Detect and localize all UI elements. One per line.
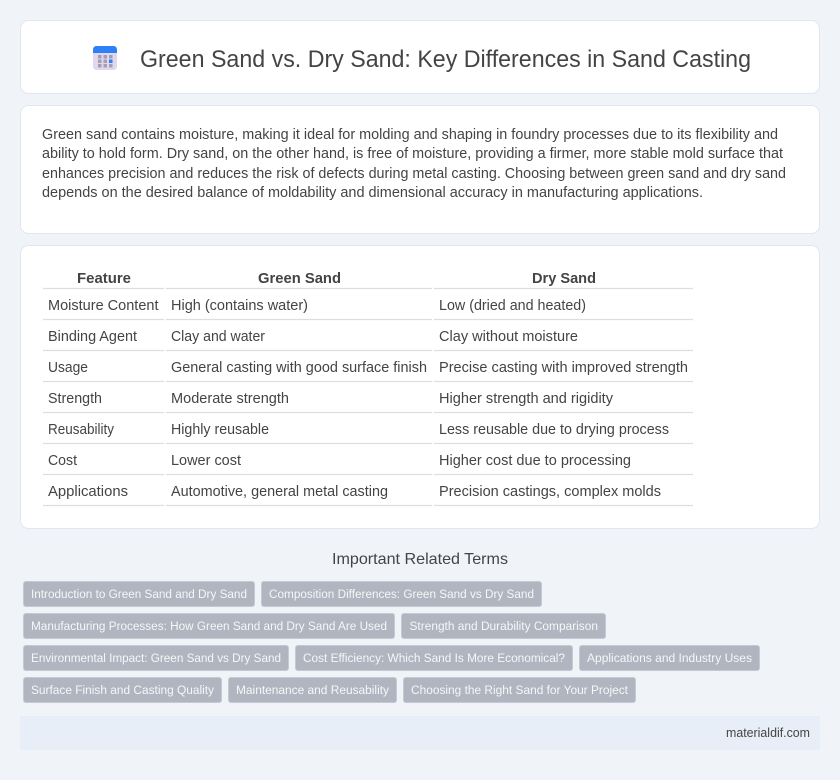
table row: cost [48, 453, 631, 469]
table row: cost: Higher cost due to processing [439, 453, 631, 469]
chip: composition: Composition Differences: Green Sand vs Dry Sand [269, 587, 534, 601]
table row: binding agent: Clay without moisture [439, 329, 578, 345]
table row: cost: Lower cost [171, 453, 241, 469]
table row: applications [48, 484, 661, 500]
table row: moisture content: Low (dried and heated) [439, 298, 586, 314]
text block: introduction paragraph: ability to hold form. Dry sand, on the other hand, is free of moisture, providing a firmer, more stable mold surface that [42, 146, 783, 162]
chip: choosing: Choosing the Right Sand for Your Project [411, 683, 629, 697]
icon: calendar table [93, 46, 117, 70]
chip: cost: Cost Efficiency: Which Sand Is More Economical? [303, 651, 565, 665]
chip: maintenance [228, 678, 396, 702]
footer [20, 716, 820, 750]
title: Green Sand vs. Dry Sand: Key Differences in Sand Casting [140, 46, 751, 73]
chip: environmental [24, 646, 288, 670]
table row: moisture content: Moisture Content [48, 298, 159, 314]
chip: applications [580, 646, 760, 670]
table row: binding agent [48, 329, 578, 345]
table row: usage: Precise casting with improved strength [439, 360, 688, 376]
table header row: Feature [77, 270, 131, 287]
chip: surface finish [24, 678, 222, 702]
table row: cost: Cost [48, 453, 77, 469]
heading: important related terms: Important Related Terms [332, 551, 508, 568]
related term chips [24, 582, 760, 702]
table row: applications: Automotive, general metal casting [171, 484, 388, 500]
table row: strength [48, 391, 614, 407]
table row: applications: Applications [48, 484, 128, 500]
table row: usage: General casting with good surface finish [171, 360, 427, 376]
chip: applications: Applications and Industry Uses [587, 651, 752, 665]
table row: reusability: Less reusable due to drying process [439, 422, 669, 438]
chip: manufacturing [24, 614, 394, 638]
table row: usage: Usage [48, 360, 88, 376]
table row: usage [48, 360, 688, 376]
table header row [77, 270, 596, 287]
table row: moisture content: High (contains water) [171, 298, 308, 314]
table row: binding agent: Clay and water [171, 329, 265, 345]
table header row: Green Sand [258, 270, 341, 287]
text block: introduction paragraph: depends on the desired balance of moldability and dimensional accuracy in manufacturing applications. [42, 185, 703, 201]
chip: introduction [24, 582, 254, 606]
table row: binding agent: Binding Agent [48, 329, 137, 345]
chip: introduction: Introduction to Green Sand and Dry Sand [31, 587, 247, 601]
table row: strength: Moderate strength [171, 391, 289, 407]
table row: reusability: Reusability [48, 422, 115, 438]
table header row: Dry Sand [532, 270, 596, 287]
panel: header [20, 20, 820, 94]
chip: maintenance: Maintenance and Reusability [236, 683, 390, 697]
chip: manufacturing: Manufacturing Processes: How Green Sand and Dry Sand Are Used [31, 619, 387, 633]
footer: materialdif.com [726, 726, 810, 740]
chip: choosing [404, 678, 636, 702]
panel: comparison table [20, 246, 820, 528]
table row: reusability [48, 422, 669, 438]
text block: introduction paragraph: enhances precision and reduces the risk of defects during metal casting. Choosing between green sand and dry sand [42, 166, 786, 182]
chip: cost [296, 646, 572, 670]
text block: introduction paragraph [42, 127, 786, 201]
chip: strength [402, 614, 606, 638]
table row: moisture content [48, 298, 586, 314]
panel: introduction [20, 106, 820, 234]
table row: strength: Strength [48, 391, 102, 407]
chip: strength: Strength and Durability Comparison [410, 619, 598, 633]
text block: introduction paragraph: Green sand contains moisture, making it ideal for molding and shaping in foundry processes due to its flexibility and [42, 127, 778, 143]
table row: reusability: Highly reusable [171, 422, 269, 438]
table row: strength: Higher strength and rigidity [439, 391, 614, 407]
chip: surface finish: Surface Finish and Casting Quality [31, 683, 215, 697]
chip: environmental: Environmental Impact: Green Sand vs Dry Sand [31, 651, 281, 665]
table row: applications: Precision castings, complex molds [439, 484, 661, 500]
chip: composition [262, 582, 542, 606]
